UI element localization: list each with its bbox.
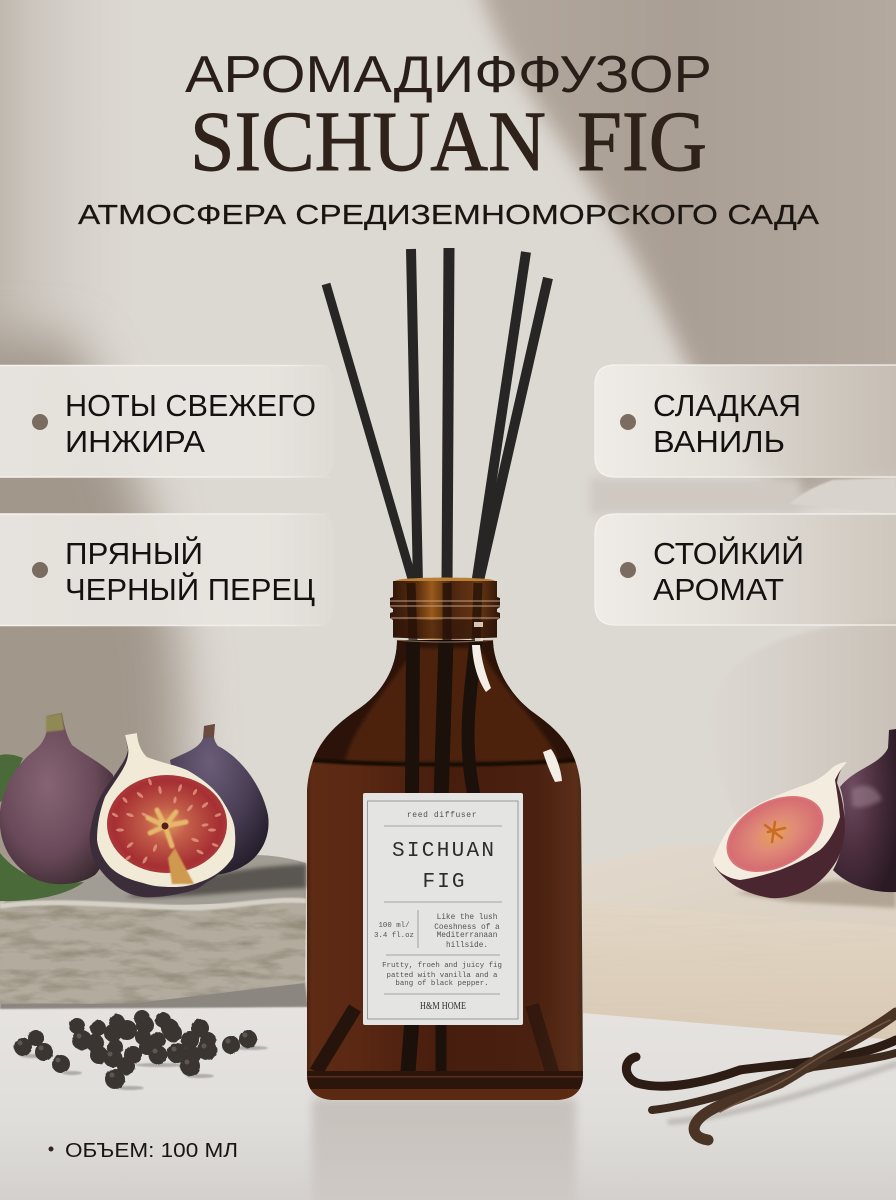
panel: notes left bottom [0,514,334,626]
vanilla pods [626,1013,896,1140]
note text: ЧЕРНЫЙ ПЕРЕЦ [65,571,315,607]
note text: НОТЫ СВЕЖЕГО [65,388,316,423]
product name: FIG [577,93,707,189]
bottle label: Like the lush [437,914,497,922]
bottle body [300,630,590,1110]
bottle label: Mediterranaan [437,932,497,940]
stone pedestal [0,855,310,1010]
bottle base [300,1071,590,1089]
fig: whole left [0,713,114,884]
fig: cut half right [713,762,847,898]
shoulder shade above liquid [312,640,576,762]
product name: SICHUAN [190,93,546,189]
bullet [32,414,48,430]
note text: СЛАДКАЯ [653,388,801,423]
note text [65,535,315,607]
bottle label: bang of black pepper. [395,980,489,988]
floor [0,1000,896,1200]
panel: notes right bottom [595,514,896,625]
reed sticks [326,248,548,585]
shelf: wood block [583,845,896,1045]
bottle label: patted with vanilla and a [387,972,498,980]
note text [653,535,804,607]
note text [65,388,316,459]
volume note: ОБЪЕМ: 100 МЛ [65,1140,238,1162]
glass highlights [472,645,562,782]
panel: notes left top [0,365,334,477]
bullet [32,562,48,578]
bullet [620,562,636,578]
fig: cut half left [90,733,235,897]
bullet [620,414,636,430]
bottle label: reed diffuser [407,811,477,820]
bottle label: hillside. [446,942,488,950]
note text [653,388,801,459]
label brand: H&M HOME [420,1001,466,1012]
note text: ВАНИЛЬ [653,424,785,459]
bottle label: Coeshness of a [434,924,500,932]
panel: notes right top [595,365,896,477]
bottle label: Frutty, froeh and juicy fig [382,962,502,970]
background arch shape [710,620,896,860]
title: АРОМАДИФФУЗОР [185,46,712,104]
bottle label [363,793,523,1025]
bottle label: 3.4 fl.oz [374,932,414,940]
note text: ПРЯНЫЙ [65,535,203,571]
leaf [0,754,84,901]
note text: АРОМАТ [653,572,784,607]
label title [392,840,494,894]
bottle neck [390,578,500,642]
note text: СТОЙКИЙ [653,535,804,571]
label title: SICHUAN [392,840,494,863]
liquid line [310,760,578,764]
subtitle: АТМОСФЕРА СРЕДИЗЕМНОМОРСКОГО САДА [78,199,819,230]
black pepper [14,1010,268,1090]
reeds seen through the glass [316,640,553,1075]
bottle label: 100 ml/ [378,922,410,930]
fig: whole back [170,724,269,875]
fig: whole right [833,729,896,892]
diffuser bottle [300,578,590,1110]
note text: ИНЖИРА [65,424,205,459]
bottle floor reflection [312,1098,576,1200]
label title: FIG [422,871,464,894]
